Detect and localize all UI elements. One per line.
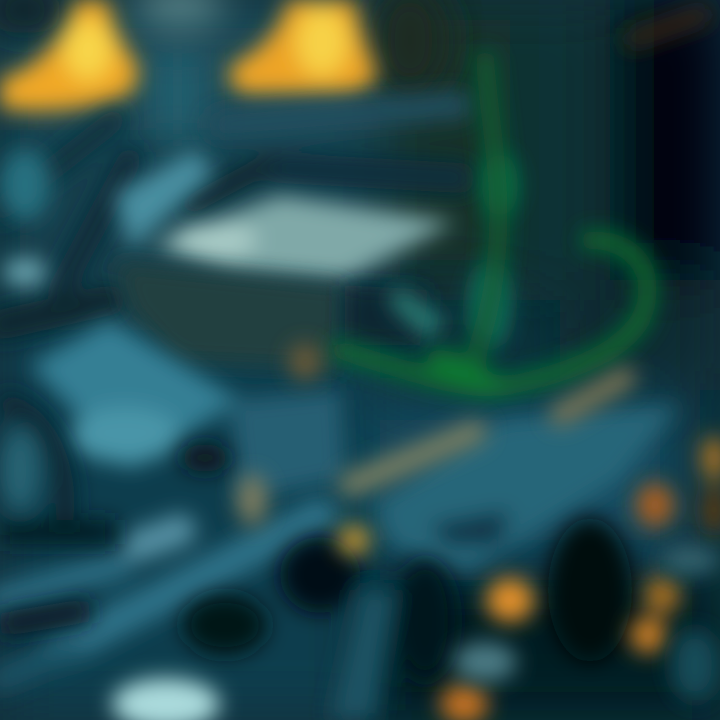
- pale blue highlights upper left: [0, 149, 215, 286]
- dark shadow around box: [345, 285, 430, 345]
- orange and tan dots: [237, 343, 720, 720]
- faint orange streak top right: [625, 12, 710, 42]
- lower right highlights: [453, 546, 720, 701]
- green cable: [340, 60, 648, 387]
- central box lid: [150, 195, 455, 280]
- dark shapes lower centre: [181, 444, 632, 720]
- tan sticks: [350, 378, 625, 485]
- light blue floor panels: [30, 320, 345, 500]
- diagonal streaks lower left: [0, 515, 320, 680]
- icon: left yellow boot: [0, 0, 138, 111]
- diagonal dark bands upper left: [0, 105, 460, 325]
- bright blob at bottom: [112, 678, 220, 720]
- teal block right of box: [390, 153, 518, 347]
- right panel: [375, 405, 680, 572]
- central box body: [115, 262, 345, 370]
- icon: right yellow boot: [229, 0, 376, 94]
- dark coil bottom left: [0, 400, 115, 625]
- dark top gap between boots: [0, 0, 450, 140]
